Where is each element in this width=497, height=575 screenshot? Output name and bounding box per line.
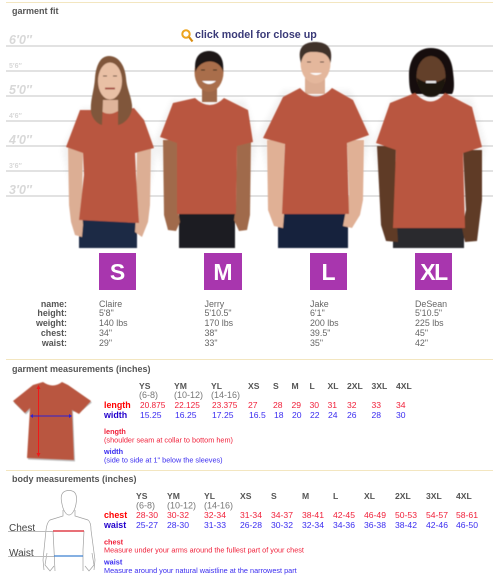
body size headers: YS	[136, 491, 148, 501]
garment length row: 28	[273, 400, 283, 410]
body waist row: 25-27	[136, 520, 158, 530]
body chest row: 28-30	[136, 510, 158, 520]
body size headers: XS	[240, 491, 252, 501]
garment length row: 32	[347, 400, 357, 410]
garment width row	[103, 410, 406, 420]
heading: garment measurements: garment measurements (inches)	[12, 364, 151, 374]
body size headers	[136, 491, 472, 510]
body chest row: 38-41	[302, 510, 324, 520]
garment size headers: XL	[328, 381, 338, 391]
garment width row: 24	[328, 410, 338, 420]
body waist row	[103, 520, 478, 530]
stats: DeSean: 225 lbs	[415, 318, 444, 328]
stats: Claire: 140 lbs	[99, 318, 128, 328]
stats: Jerry: 170 lbs	[204, 318, 234, 328]
body size headers: 2XL	[395, 491, 411, 501]
garment length row: 27	[248, 400, 258, 410]
body size headers: S	[271, 491, 277, 501]
body chest row: 42-45	[333, 510, 355, 520]
body size headers: (10-12)	[167, 500, 196, 510]
length note: length	[104, 427, 126, 436]
garment width row: 30	[396, 410, 406, 420]
model stat labels	[35, 299, 67, 348]
garment size headers: 2XL	[347, 381, 363, 391]
height chart: 3′6″	[9, 163, 22, 170]
garment width row: 20	[292, 410, 302, 420]
width note: (side to side at 1" below the sleeves)	[104, 456, 223, 464]
stats: DeSean: 5'10.5"	[415, 308, 442, 318]
garment size headers: S	[273, 381, 279, 391]
garment width row: 15.25	[140, 410, 162, 420]
stats: DeSean: 45"	[415, 328, 428, 338]
garment width row: 17.25	[212, 410, 234, 420]
body chest row: 46-49	[364, 510, 386, 520]
garment size headers: (6-8)	[139, 390, 158, 400]
stats: Jake: 39.5"	[310, 328, 330, 338]
length note: (shoulder seam at collar to bottom hem)	[104, 436, 233, 444]
body chest row: chest	[104, 510, 127, 520]
model stat labels: weight:	[35, 318, 67, 328]
garment length row: 22.125	[174, 400, 200, 410]
garment length row: 34	[396, 400, 406, 410]
garment width row: width	[103, 410, 127, 420]
body waist row: 31-33	[204, 520, 226, 530]
garment size headers: (10-12)	[174, 390, 203, 400]
body waist row: 32-34	[302, 520, 324, 530]
size badge: S	[99, 253, 136, 290]
size badge: M	[204, 253, 242, 290]
body chest row	[104, 510, 478, 520]
heading: body measurements: body measurements (inches)	[12, 474, 137, 484]
model stat labels: waist:	[41, 338, 67, 348]
garment size headers	[139, 381, 412, 400]
icon: magnifying glass	[182, 30, 192, 42]
body waist row: waist	[103, 520, 126, 530]
body size headers: (6-8)	[136, 500, 155, 510]
stats: Jerry: 38"	[204, 328, 218, 338]
garment width row: 16.25	[175, 410, 197, 420]
body size headers: L	[333, 491, 338, 501]
body waist row: 34-36	[333, 520, 355, 530]
garment size headers: 4XL	[396, 381, 412, 391]
body chest row: 32-34	[204, 510, 226, 520]
stats: Jake: Jake	[310, 299, 329, 309]
height chart: 3′0″	[9, 183, 33, 197]
body chest row: 34-37	[271, 510, 293, 520]
stats: DeSean: 42"	[415, 338, 428, 348]
garment length row	[104, 400, 406, 410]
body size headers: M	[302, 491, 309, 501]
garment width row: 26	[347, 410, 357, 420]
waist note: waist	[103, 558, 123, 566]
garment size headers: 3XL	[372, 381, 387, 391]
garment size headers: YM	[174, 381, 187, 391]
model stat labels: height:	[37, 308, 67, 318]
body size headers: YM	[167, 491, 180, 501]
garment length row: 20.875	[140, 400, 166, 410]
body waist row: 30-32	[271, 520, 293, 530]
body chest row: 30-32	[167, 510, 189, 520]
body chest row: 31-34	[240, 510, 262, 520]
size badge: S: S	[110, 259, 125, 285]
stats: Claire	[99, 299, 128, 348]
icon: t-shirt with measurement arrows	[13, 382, 92, 462]
body size headers: 3XL	[426, 491, 442, 501]
waist note: Measure around your natural waistline at the narrowest part	[104, 566, 297, 575]
stats: Jake: 6'1"	[310, 308, 325, 318]
body waist row: 26-28	[240, 520, 262, 530]
click model hint: click model for close up	[195, 29, 317, 41]
model: Claire	[62, 56, 158, 248]
garment width row: 16.5	[249, 410, 266, 420]
stats: Jake: 200 lbs	[310, 318, 339, 328]
body waist row: 36-38	[364, 520, 386, 530]
height chart: 4′0″	[8, 133, 33, 147]
garment size headers: YS	[139, 381, 151, 391]
garment width row: 18	[274, 410, 284, 420]
stats: DeSean	[415, 299, 447, 348]
garment length row: 31	[328, 400, 337, 410]
body waist row: 28-30	[167, 520, 189, 530]
body size headers: XL	[364, 491, 375, 501]
model: DeSean	[372, 48, 486, 248]
body size headers: YL	[204, 491, 215, 501]
garment length row: 29	[292, 400, 301, 410]
model: Jake	[258, 42, 372, 248]
body waist row: 38-42	[395, 520, 417, 530]
stats: Jerry: Jerry	[204, 299, 225, 309]
body size headers: 4XL	[456, 491, 472, 501]
model stat labels: name:	[41, 299, 67, 309]
stats: Claire: 5'8"	[99, 308, 114, 318]
body chest row: 50-53	[395, 510, 417, 520]
stats: Claire: 29"	[99, 338, 112, 348]
stats: Jake: 35"	[310, 338, 323, 348]
size badge: L: L	[321, 259, 336, 285]
garment size headers: L	[310, 381, 315, 391]
body waist row: 42-46	[426, 520, 448, 530]
icon: body outline diagram	[8, 490, 95, 571]
garment length row: length	[104, 400, 131, 410]
stats: DeSean: DeSean	[415, 299, 447, 309]
model stat labels: chest:	[41, 328, 67, 338]
stats: Jerry	[204, 299, 234, 348]
icon: body outline diagram: Waist	[9, 548, 34, 559]
height chart: 4′6″	[9, 113, 22, 120]
stats: Claire: Claire	[99, 299, 122, 309]
garment size headers: M	[292, 381, 299, 391]
length note	[104, 427, 233, 444]
stats: Jerry: 5'10.5"	[204, 308, 232, 318]
stats: Jerry: 33"	[204, 338, 218, 348]
garment size headers: XS	[248, 381, 260, 391]
chest note: chest	[104, 538, 124, 546]
garment width row: 22	[310, 410, 320, 420]
icon: body outline diagram: Chest	[9, 523, 35, 534]
body size headers: (14-16)	[204, 500, 233, 510]
body chest row: 54-57	[426, 510, 448, 520]
garment length row: 33	[372, 400, 381, 410]
heading: garment fit: garment fit	[12, 6, 59, 16]
height chart: 5′6″	[9, 63, 22, 70]
chest note	[104, 538, 304, 554]
garment size headers: YL	[211, 381, 222, 391]
width note	[103, 447, 223, 464]
garment length row: 23.375	[212, 400, 238, 410]
garment length row: 30	[310, 400, 319, 410]
stats: Jake	[310, 299, 339, 348]
garment size headers: (14-16)	[211, 390, 240, 400]
waist note	[103, 558, 297, 575]
size badge: XL: XL	[420, 259, 448, 285]
chest note: Measure under your arms around the fullest part of your chest	[104, 546, 304, 554]
garment width row: 28	[372, 410, 381, 420]
height chart	[6, 33, 493, 197]
size badge: M: M	[213, 259, 233, 285]
model: Jerry	[155, 51, 258, 248]
body waist row: 46-50	[456, 520, 478, 530]
size badge: L	[310, 253, 347, 290]
stats: Claire: 34"	[99, 328, 112, 338]
height chart: 5′0″	[9, 83, 33, 97]
size badge: XL	[415, 253, 452, 290]
body chest row: 58-61	[456, 510, 478, 520]
width note: width	[103, 447, 123, 456]
height chart: 6′0″	[9, 33, 33, 47]
